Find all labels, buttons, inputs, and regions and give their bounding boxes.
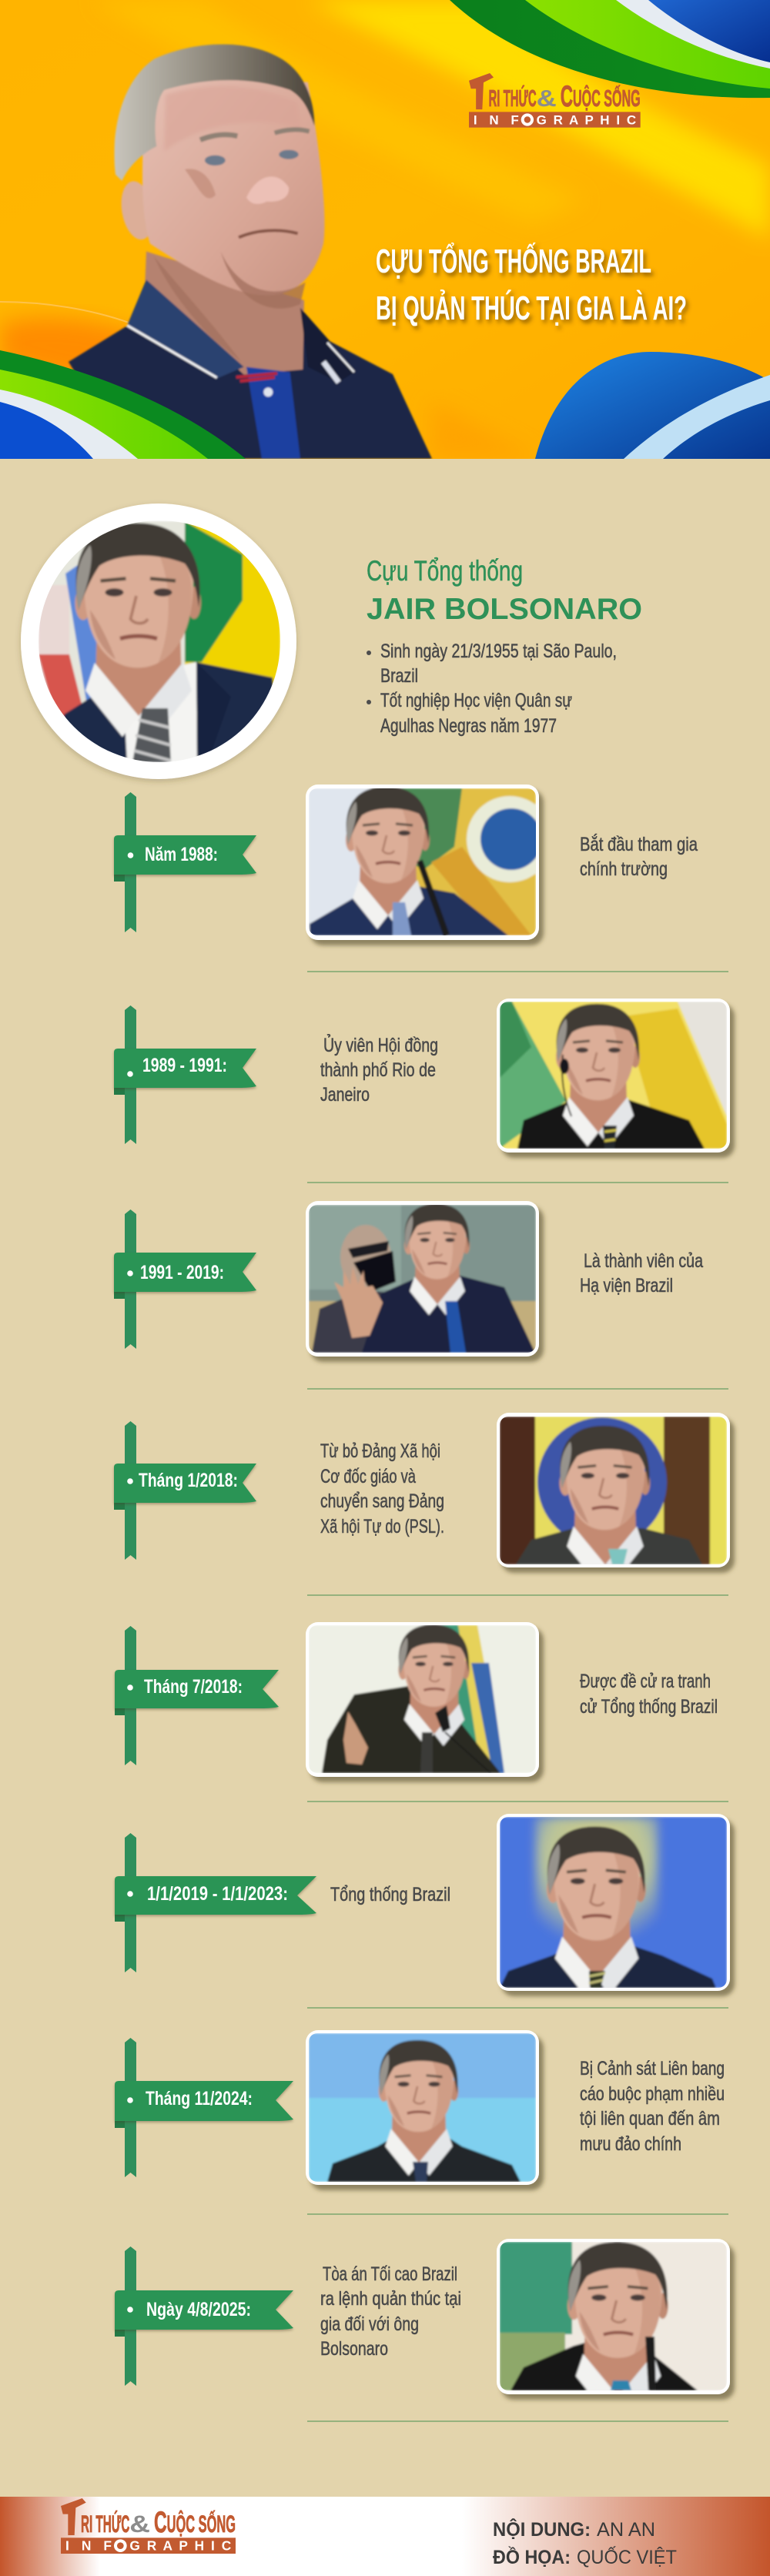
- timeline item: 1988: [114, 785, 698, 940]
- photo card: 7/2018: [306, 1622, 539, 1777]
- timeline item: 7/2018: [115, 1622, 718, 1777]
- profile bullets: Tốt nghiệp Học viện Quân sự: [380, 690, 572, 711]
- description: 1988: [580, 833, 698, 880]
- profile bullets: Brazil: [380, 665, 418, 687]
- description: 11/2024: tội liên quan đến âm: [580, 2108, 720, 2129]
- logo: header: [469, 73, 641, 128]
- description: 1988: Bắt đầu tham gia: [580, 833, 698, 855]
- logo: header: UỘC SỐNG: [573, 84, 641, 112]
- hero banner: [0, 0, 770, 459]
- description: 4/8/2025: Tòa án Tối cao Brazil: [323, 2263, 457, 2285]
- description: 1/2018: chuyển sang Đảng: [320, 1490, 444, 1512]
- timeline item: 11/2024: [115, 2030, 725, 2185]
- logo: footer: [61, 2498, 236, 2554]
- credits: ĐỒ HỌA:: [493, 2545, 571, 2568]
- description: 4/8/2025: gia đối với ông: [320, 2313, 419, 2335]
- logo: footer: UỘC SỐNG: [167, 2510, 236, 2538]
- bottom-right blue ball: [535, 352, 770, 459]
- logo: footer: C: [154, 2505, 167, 2539]
- photo card: 1989-1991: [497, 999, 730, 1153]
- timeline item: 7/2018: Tháng 7/2018:: [144, 1676, 243, 1698]
- description: 11/2024: [580, 2058, 725, 2155]
- profile bullets: [367, 641, 617, 737]
- description: 7/2018: cử Tổng thống Brazil: [580, 1696, 718, 1718]
- description: 1/2018: Cơ đốc giáo và: [320, 1466, 416, 1487]
- description: 4/8/2025: [320, 2263, 461, 2360]
- portrait: hero: [69, 44, 432, 459]
- bottom-left swoosh: [0, 350, 246, 459]
- photo card: 1991-2019: [306, 1201, 539, 1357]
- credits: NỘI DUNG:: [493, 2517, 591, 2541]
- credits: AN AN: [597, 2519, 655, 2541]
- description: 4/8/2025: ra lệnh quản thúc tại: [320, 2288, 461, 2310]
- photo card: 1988: [306, 785, 553, 940]
- description: 1989-1991: Ủy viên Hội đồng: [323, 1033, 438, 1056]
- logo: footer: RI THỨC: [81, 2510, 129, 2538]
- photo card: 11/2024: [306, 2030, 539, 2185]
- profile heading: Cựu Tổng thống: [367, 555, 523, 587]
- timeline item: 4/8/2025: Ngày 4/8/2025:: [146, 2299, 251, 2320]
- description: 1/2018: Xã hội Tự do (PSL).: [320, 1516, 444, 1537]
- photo card: 4/8/2025: [497, 2239, 730, 2413]
- timeline item: 1/2018: Tháng 1/2018:: [139, 1470, 238, 1491]
- footer: [0, 2497, 770, 2576]
- timeline item: 2019-2023: [115, 1814, 730, 1995]
- description: 2019-2023: Tổng thống Brazil: [330, 1884, 450, 1905]
- credits: [493, 2517, 677, 2568]
- logo: header: RI THỨC: [489, 84, 537, 112]
- description: 1988: chính trường: [580, 858, 668, 880]
- logo: footer: I N F: [65, 2538, 112, 2554]
- timeline item: 1988: Năm 1988:: [145, 844, 218, 865]
- logo: footer: G R A P H I C: [129, 2538, 232, 2554]
- description: 1/2018: [320, 1440, 444, 1537]
- description: 1991-2019: [580, 1250, 703, 1296]
- logo: header: &: [537, 85, 557, 112]
- description: 11/2024: Bị Cảnh sát Liên bang: [580, 2058, 725, 2079]
- profile heading: JAIR BOLSONARO: [367, 593, 642, 626]
- profile heading: [367, 555, 642, 626]
- timeline item: 1989-1991: 1989 - 1991:: [142, 1055, 227, 1076]
- description: 1989-1991: [320, 1033, 438, 1106]
- description: 1991-2019: Là thành viên của: [584, 1250, 703, 1272]
- timeline item: 1989-1991: [114, 999, 730, 1153]
- profile bullets: Agulhas Negras năm 1977: [380, 715, 557, 737]
- portrait circle: [21, 503, 296, 779]
- title: [376, 241, 687, 327]
- description: 11/2024: cáo buộc phạm nhiều: [580, 2083, 725, 2105]
- logo: header: I N F: [474, 112, 519, 127]
- timeline item: 1/2018: [114, 1413, 730, 1580]
- logo: header: G R A P H I C: [537, 112, 636, 127]
- logo: header: C: [561, 80, 573, 113]
- description: 4/8/2025: Bolsonaro: [320, 2338, 388, 2360]
- description: 1/2018: Từ bỏ Đảng Xã hội: [320, 1440, 440, 1462]
- top-right swoosh: [450, 0, 770, 98]
- description: 1989-1991: Janeiro: [320, 1084, 370, 1106]
- timeline item: 11/2024: Tháng 11/2024:: [146, 2088, 253, 2109]
- description: 1991-2019: Hạ viện Brazil: [580, 1275, 673, 1296]
- profile bullets: Sinh ngày 21/3/1955 tại São Paulo,: [380, 641, 617, 662]
- timeline item: 1991-2019: 1991 - 2019:: [140, 1262, 224, 1283]
- description: 11/2024: mưu đảo chính: [580, 2133, 681, 2155]
- description: 7/2018: [580, 1671, 718, 1718]
- credits: QUỐC VIỆT: [577, 2545, 677, 2568]
- timeline item: 1991-2019: [114, 1201, 703, 1357]
- description: 7/2018: Được đề cử ra tranh: [580, 1671, 711, 1692]
- description: 1989-1991: thành phố Rio de: [320, 1059, 436, 1081]
- photo card: 2019-2023: [497, 1814, 730, 1995]
- timeline item: 4/8/2025: [115, 2239, 730, 2413]
- photo card: 1/2018: [497, 1413, 730, 1580]
- logo: footer: &: [129, 2511, 150, 2538]
- timeline item: 2019-2023: 1/1/2019 - 1/1/2023:: [147, 1883, 288, 1905]
